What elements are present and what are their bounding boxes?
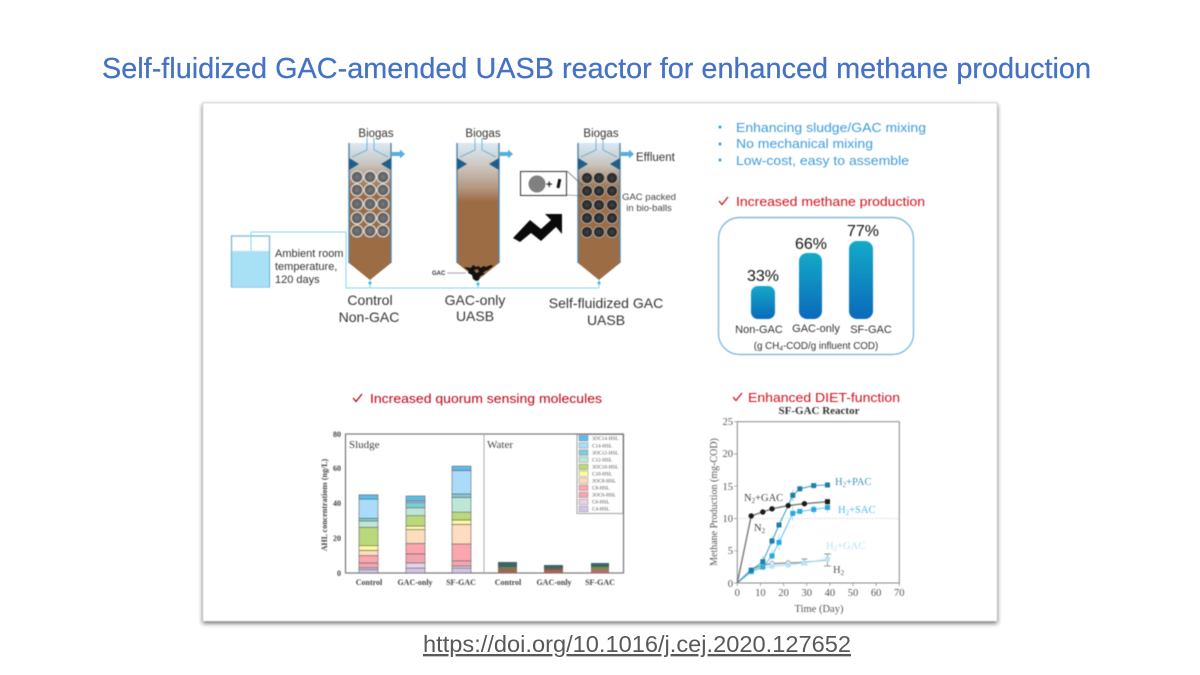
bar: non-GAC 33%: 33% [747,268,779,285]
AHL legend: C10-HSL [592,471,612,477]
series: H2+PAC [737,482,830,583]
axis labels: Methane Production (mg-COD) [709,438,720,566]
biogas labels [358,128,619,140]
GAC pile label [432,271,466,277]
chart title: SF-GAC Reactor [779,405,860,417]
biogas labels: Biogas [465,128,501,140]
GAC granule pile [464,265,493,281]
series: H2+SAC [737,502,830,583]
AHL axis labels: SF-GAC [446,578,476,587]
reactor captions: GAC-only [445,292,505,308]
diagram: reactor setup [232,128,676,328]
AHL legend: 3OC6-HSL [592,493,616,499]
unit caption: (g CH [754,341,779,352]
series labels: H [833,565,841,576]
reactor: control non-GAC [349,138,405,280]
bio-ball note [622,192,676,214]
feed tank and pipe [232,232,600,288]
AHL axis labels: GAC-only [397,578,433,587]
bar: sludge control [359,495,378,573]
panel labels sludge and water: Sludge [349,439,380,451]
feed tank label: Ambient room [275,248,343,260]
bar: SF-GAC 77% [847,223,892,336]
feed tank label: 120 days [275,274,320,286]
AHL legend [577,434,623,514]
AHL legend: 3OC14-HSL [592,436,619,442]
AHL axis labels: AHL concentrations (ng/L) [320,458,329,551]
AHL axes and frame [346,434,624,573]
reactor: self-fluidized GAC [578,138,634,280]
biogas labels: Biogas [583,128,619,140]
series labels: 2 [752,497,756,505]
AHL legend: C8-HSL [592,485,610,491]
reactor captions: Non-GAC [339,309,399,325]
axes frame and ticks [734,422,899,586]
heading: increased quorum sensing molecules: Increased quorum sensing molecules [370,391,602,406]
AHL axis labels: 40 [333,499,341,508]
axis labels: 20 [722,449,733,460]
bio-ball note: in bio-balls [626,203,672,214]
axis labels: 30 [801,588,812,599]
series labels: 2 [834,545,838,553]
series: H2 [737,554,831,583]
axis labels: 20 [778,588,789,599]
reactor: GAC-only [457,138,513,286]
series labels: N [744,493,752,504]
axis labels: 5 [728,546,733,557]
reactor captions [339,292,663,328]
bar: GAC-only 66%: GAC-only [792,323,840,335]
series labels: +GAC [837,541,865,552]
AHL axis labels [320,430,615,587]
panel labels sludge and water [349,439,513,451]
DOI link text: https://doi.org/10.1016/j.cej.2020.127652 [423,631,851,657]
axis labels: 70 [894,588,905,599]
bar: non-GAC 33% [735,268,783,336]
AHL axis labels: SF-GAC [585,578,615,587]
series: H2+GAC [737,557,830,583]
AHL legend: C4-HSL [592,507,610,513]
axis labels: Time (Day) [795,604,844,615]
series labels: +SAC [849,505,875,516]
chart: methane yield bars [718,218,914,354]
inset: bio-ball contents [520,171,583,196]
axis labels [709,417,905,615]
axis labels: 60 [871,588,881,599]
feed tank label [275,248,343,286]
benefit list [718,120,926,168]
reactor captions: Self-fluidized GAC [549,295,663,311]
axis labels: 25 [722,417,733,428]
bars: water phase [498,562,609,573]
panel: figure card [203,103,997,621]
benefit list: Low-cost, easy to assemble [736,153,909,168]
bar: sludge GAC-only [406,496,425,573]
axis labels: 15 [722,482,733,493]
series: N2+GAC [737,499,830,583]
benefit list: No mechanical mixing [736,136,873,151]
series labels: 2 [841,569,845,577]
GAC pile label: GAC [432,271,446,277]
series labels: 2 [846,509,850,517]
title: Self-fluidized GAC-amended UASB reactor for enhanced methane production [102,53,1091,85]
axis labels: 40 [825,588,835,599]
series labels [744,477,875,577]
bar: SF-GAC 77%: SF-GAC [850,324,892,336]
bar: GAC-only 66%: 66% [795,236,827,253]
feed tank label: temperature, [275,261,337,273]
arrow: improvement zigzag [513,214,562,242]
chart: methane production over time [709,405,905,615]
AHL axis labels: 20 [333,534,341,543]
axis labels: 10 [755,588,766,599]
panel labels sludge and water: Water [487,439,513,451]
unit caption: 4 [779,346,783,352]
axis labels: 0 [735,588,740,599]
AHL axis labels: 60 [333,464,341,473]
AHL axis labels: 80 [333,430,341,439]
AHL axis labels: 0 [337,569,341,578]
series labels: 2 [843,481,847,489]
series labels: +GAC [755,493,783,504]
series labels: +PAC [846,477,871,488]
AHL axis labels: GAC-only [536,578,572,587]
bio-ball note: GAC packed [622,192,676,203]
axis labels: 0 [728,579,733,590]
AHL axis labels: Control [495,578,522,587]
series labels: H [826,541,834,552]
AHL legend: 3OC8-HSL [592,478,616,484]
biogas labels: Biogas [358,128,394,140]
axis labels: 50 [848,588,858,599]
chart: AHL stacked bars [320,430,624,587]
bar: sludge SF-GAC [452,466,471,573]
unit caption: -COD/g influent COD) [783,341,878,352]
bar: non-GAC 33%: Non-GAC [735,324,783,336]
heading: increased methane production: Increased methane production [736,194,925,209]
reactor captions: UASB [456,308,494,324]
AHL axis labels: Control [356,578,383,587]
series labels: H [835,477,843,488]
reactor captions: Control [347,292,393,308]
series labels: N [754,523,762,534]
AHL legend: 3OC10-HSL [592,465,619,471]
inset: bio-ball contents: + [546,179,552,191]
axis labels: 10 [722,514,733,525]
heading: enhanced DIET-function: Enhanced DIET-function [748,390,900,405]
benefit list: Enhancing sludge/GAC mixing [736,120,926,135]
bar: SF-GAC 77%: 77% [847,223,879,240]
AHL legend: C14-HSL [592,443,612,449]
series labels: H [838,505,846,516]
AHL legend: 3OC12-HSL [592,450,619,456]
AHL legend: C12-HSL [592,457,612,463]
AHL legend: C6-HSL [592,500,610,506]
reactor captions: UASB [587,312,625,328]
series labels: 2 [762,527,766,535]
bar: GAC-only 66% [792,236,840,335]
effluent label: Effluent [636,152,676,164]
